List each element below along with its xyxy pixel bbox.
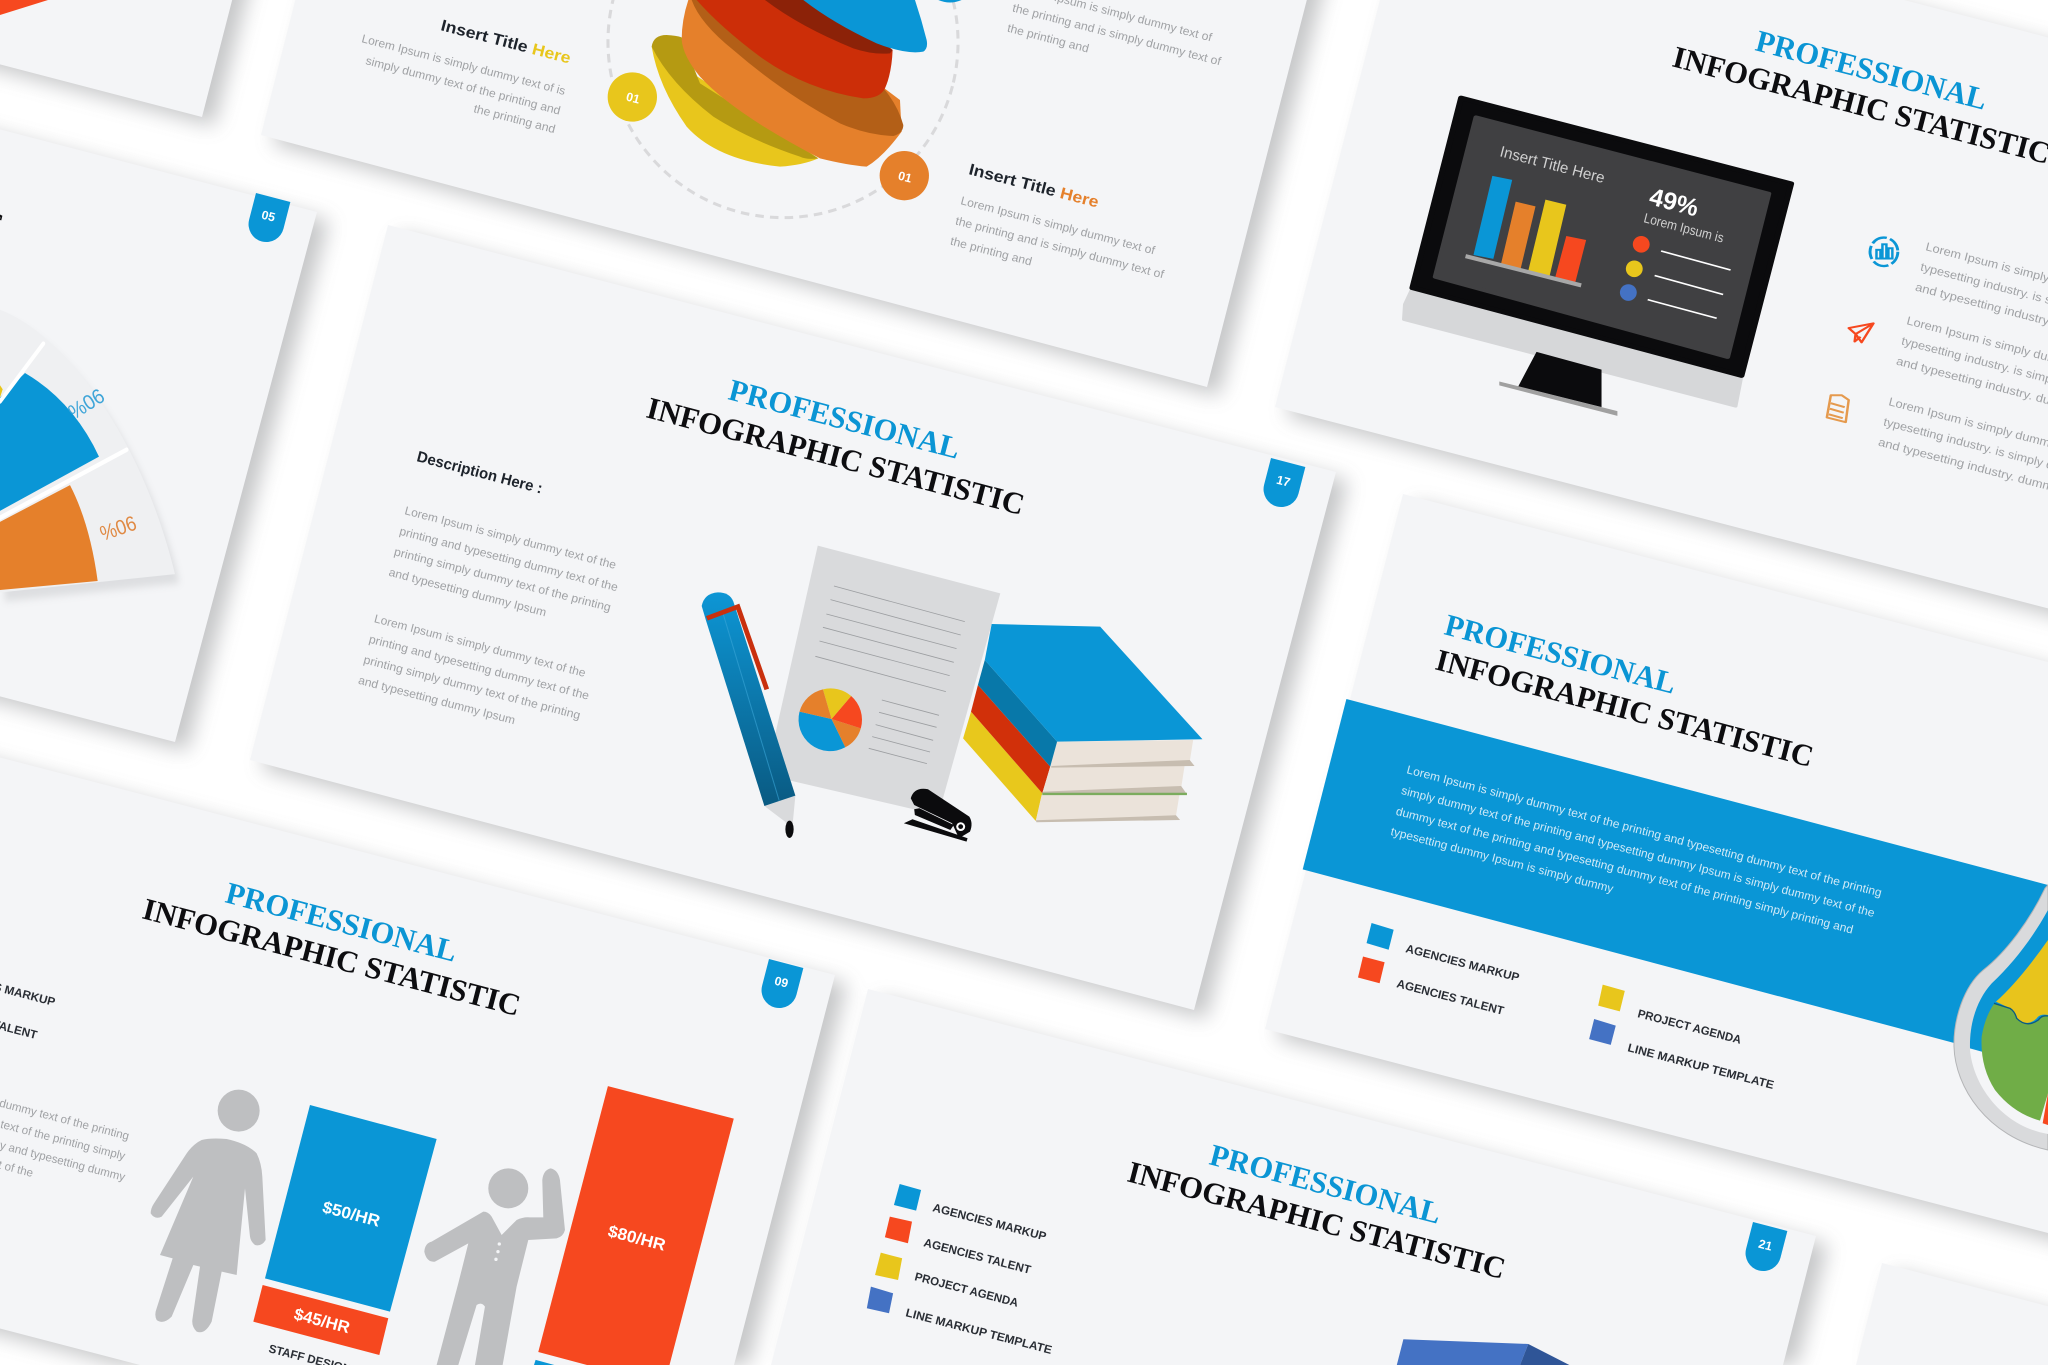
body top right: the printing and is simply dummy text of xyxy=(1011,2,1223,69)
blue band xyxy=(1303,699,2048,1068)
slide: main 17 xyxy=(250,225,1336,1010)
paragraph 3 xyxy=(1877,395,2048,511)
title: PROFESSIONAL xyxy=(725,373,964,466)
dashed ring xyxy=(570,0,996,256)
layered spiral illustration xyxy=(608,0,962,200)
body left line 3: the printing and xyxy=(472,102,557,136)
body top right xyxy=(1006,0,1228,89)
band text: typesetting dummy Ipsum is simply dummy xyxy=(1389,825,1615,896)
legend squares xyxy=(867,1184,921,1313)
value $80/HR: $80/HR xyxy=(606,1221,668,1255)
badge 09 xyxy=(758,959,803,1012)
paragraph 2 xyxy=(1895,314,2048,430)
bar orange tall xyxy=(538,1086,734,1365)
badge 21: 21 xyxy=(1757,1237,1774,1254)
slide: legend 21 xyxy=(771,989,1816,1365)
legend: project agenda: PROJECT AGENDA xyxy=(1636,1007,1743,1047)
paragraph 1 xyxy=(1914,240,2048,356)
bar blue fragment xyxy=(534,1360,554,1365)
body right: Lorem Ipsum is simply dummy text of xyxy=(959,194,1157,258)
band text xyxy=(1389,763,1883,961)
paragraph 2: printing simply dummy text of the printing xyxy=(362,653,582,722)
slide: people chart 09 xyxy=(0,728,835,1365)
paragraph 1: printing and typesetting dummy text of the xyxy=(398,525,619,594)
body right: the printing and is simply dummy text of xyxy=(954,215,1166,282)
3D box xyxy=(1397,1339,1569,1365)
value $45/HR: $45/HR xyxy=(292,1304,352,1337)
body left line 1: Lorem Ipsum is simply dummy text of is xyxy=(360,32,567,98)
body right: the printing and xyxy=(949,235,1033,268)
monitor illustration xyxy=(1404,98,1791,416)
paragraph 2: printing and typesetting dummy text of the xyxy=(367,633,591,703)
body right xyxy=(949,194,1171,302)
badge 21 xyxy=(1742,1222,1787,1275)
slide: spiral diagram xyxy=(261,0,1345,387)
step number 01 yellow: 01 xyxy=(625,90,642,107)
screen title: Insert Title Here xyxy=(1498,143,1607,187)
icon: document xyxy=(1827,395,1849,422)
icon: paper plane xyxy=(1849,323,1874,342)
band text: Lorem Ipsum is simply dummy text of the printing and typesetting dummy text of the printing xyxy=(1405,763,1883,900)
legend: agencies markup: AGENCIES MARKUP xyxy=(931,1201,1048,1243)
slide: blue band xyxy=(1265,494,2048,1276)
drop puzzle shape xyxy=(1954,885,2048,1150)
red corner shape xyxy=(0,0,48,15)
badge 17 xyxy=(1260,458,1305,511)
legend: agencies talent: AGENCIES TALENT xyxy=(1395,977,1505,1018)
figure: woman xyxy=(151,1090,266,1332)
legend: agencies markup: AGENCIES MARKUP xyxy=(1404,942,1521,984)
badge 05 xyxy=(245,193,290,246)
illustration: pen paper books stapler xyxy=(702,546,1202,842)
fan chart xyxy=(0,310,180,601)
legend: line markup template: LINE MARKUP TEMPLATE xyxy=(1626,1041,1775,1092)
slide: fan chart 05 xyxy=(0,0,317,742)
band text: simply dummy text of the printing and typesetting dummy Ipsum is simply dummy text of the xyxy=(1400,784,1876,920)
paragraph 2 xyxy=(357,612,596,744)
body fragment xyxy=(0,1097,131,1184)
screen caption: Lorem Ipsum is xyxy=(1642,210,1726,246)
paragraph 1: and typesetting dummy Ipsum xyxy=(387,566,548,619)
title: INFOGRAPHIC STATISTIC xyxy=(1124,1155,1509,1286)
title: INFOGRAPHIC STATISTIC xyxy=(1669,40,2048,171)
title: PROFESSIONAL xyxy=(1441,608,1680,701)
stapler xyxy=(904,789,972,842)
bar blue xyxy=(265,1105,437,1312)
label %06 orange: %06 xyxy=(97,512,140,546)
paragraph 2: Lorem Ipsum is simply dummy text of the xyxy=(373,612,587,680)
body fragment: dummy text of the printing xyxy=(0,1097,131,1143)
description heading: Description Here : xyxy=(415,448,544,497)
title: PROFESSIONAL xyxy=(1752,24,1991,117)
title: PROFESSIONAL xyxy=(222,876,461,969)
slide: monitor xyxy=(1275,0,2048,654)
paragraph 1: Lorem Ipsum is simply dummy text of the xyxy=(403,504,617,572)
slide: top-left corner xyxy=(0,0,340,117)
paper with lines and pie xyxy=(766,546,1000,815)
legend: project agenda: PROJECT AGENDA xyxy=(913,1270,1020,1310)
paragraph 1 xyxy=(387,504,625,635)
icon: chart ring xyxy=(1870,238,1898,266)
title: INFOGRAPHIC STATISTIC xyxy=(1432,643,1817,774)
paragraph 2: and typesetting dummy Ipsum xyxy=(357,674,517,727)
step number 01 orange: 01 xyxy=(897,169,914,186)
slide: bottom-right corner xyxy=(1856,1263,2048,1365)
title: PROFESSIONAL xyxy=(1206,1138,1445,1231)
pen xyxy=(702,592,795,838)
badge 09: 09 xyxy=(773,974,790,991)
body top right: the printing and xyxy=(1006,22,1090,55)
band text: dummy text of the printing and typesetting dummy text of the printing simply printing and xyxy=(1395,805,1855,937)
badge 05: 05 xyxy=(260,208,277,225)
figure: man xyxy=(424,1168,565,1365)
title: INFOGRAPHIC STATISTIC xyxy=(643,391,1028,522)
legend: line markup template: LINE MARKUP TEMPLATE xyxy=(904,1306,1053,1357)
paragraph 1: printing simply dummy text of the printing xyxy=(393,545,612,614)
heading left: Insert Title Here xyxy=(439,17,573,68)
badge 17: 17 xyxy=(1275,473,1292,490)
title: INFOGRAPHIC STATISTIC xyxy=(139,892,524,1023)
value $50/HR: $50/HR xyxy=(320,1197,382,1231)
body left line 2: simply dummy text of the printing and xyxy=(364,54,562,118)
legend: agencies talent: AGENCIES TALENT xyxy=(922,1236,1032,1277)
label %06 blue: %06 xyxy=(64,385,109,424)
legend squares xyxy=(1358,923,1625,1045)
heading right: Insert Title Here xyxy=(967,161,1101,212)
bar red small xyxy=(253,1285,388,1355)
screen percentage: 49% xyxy=(1646,184,1701,222)
stack of books xyxy=(963,624,1202,822)
